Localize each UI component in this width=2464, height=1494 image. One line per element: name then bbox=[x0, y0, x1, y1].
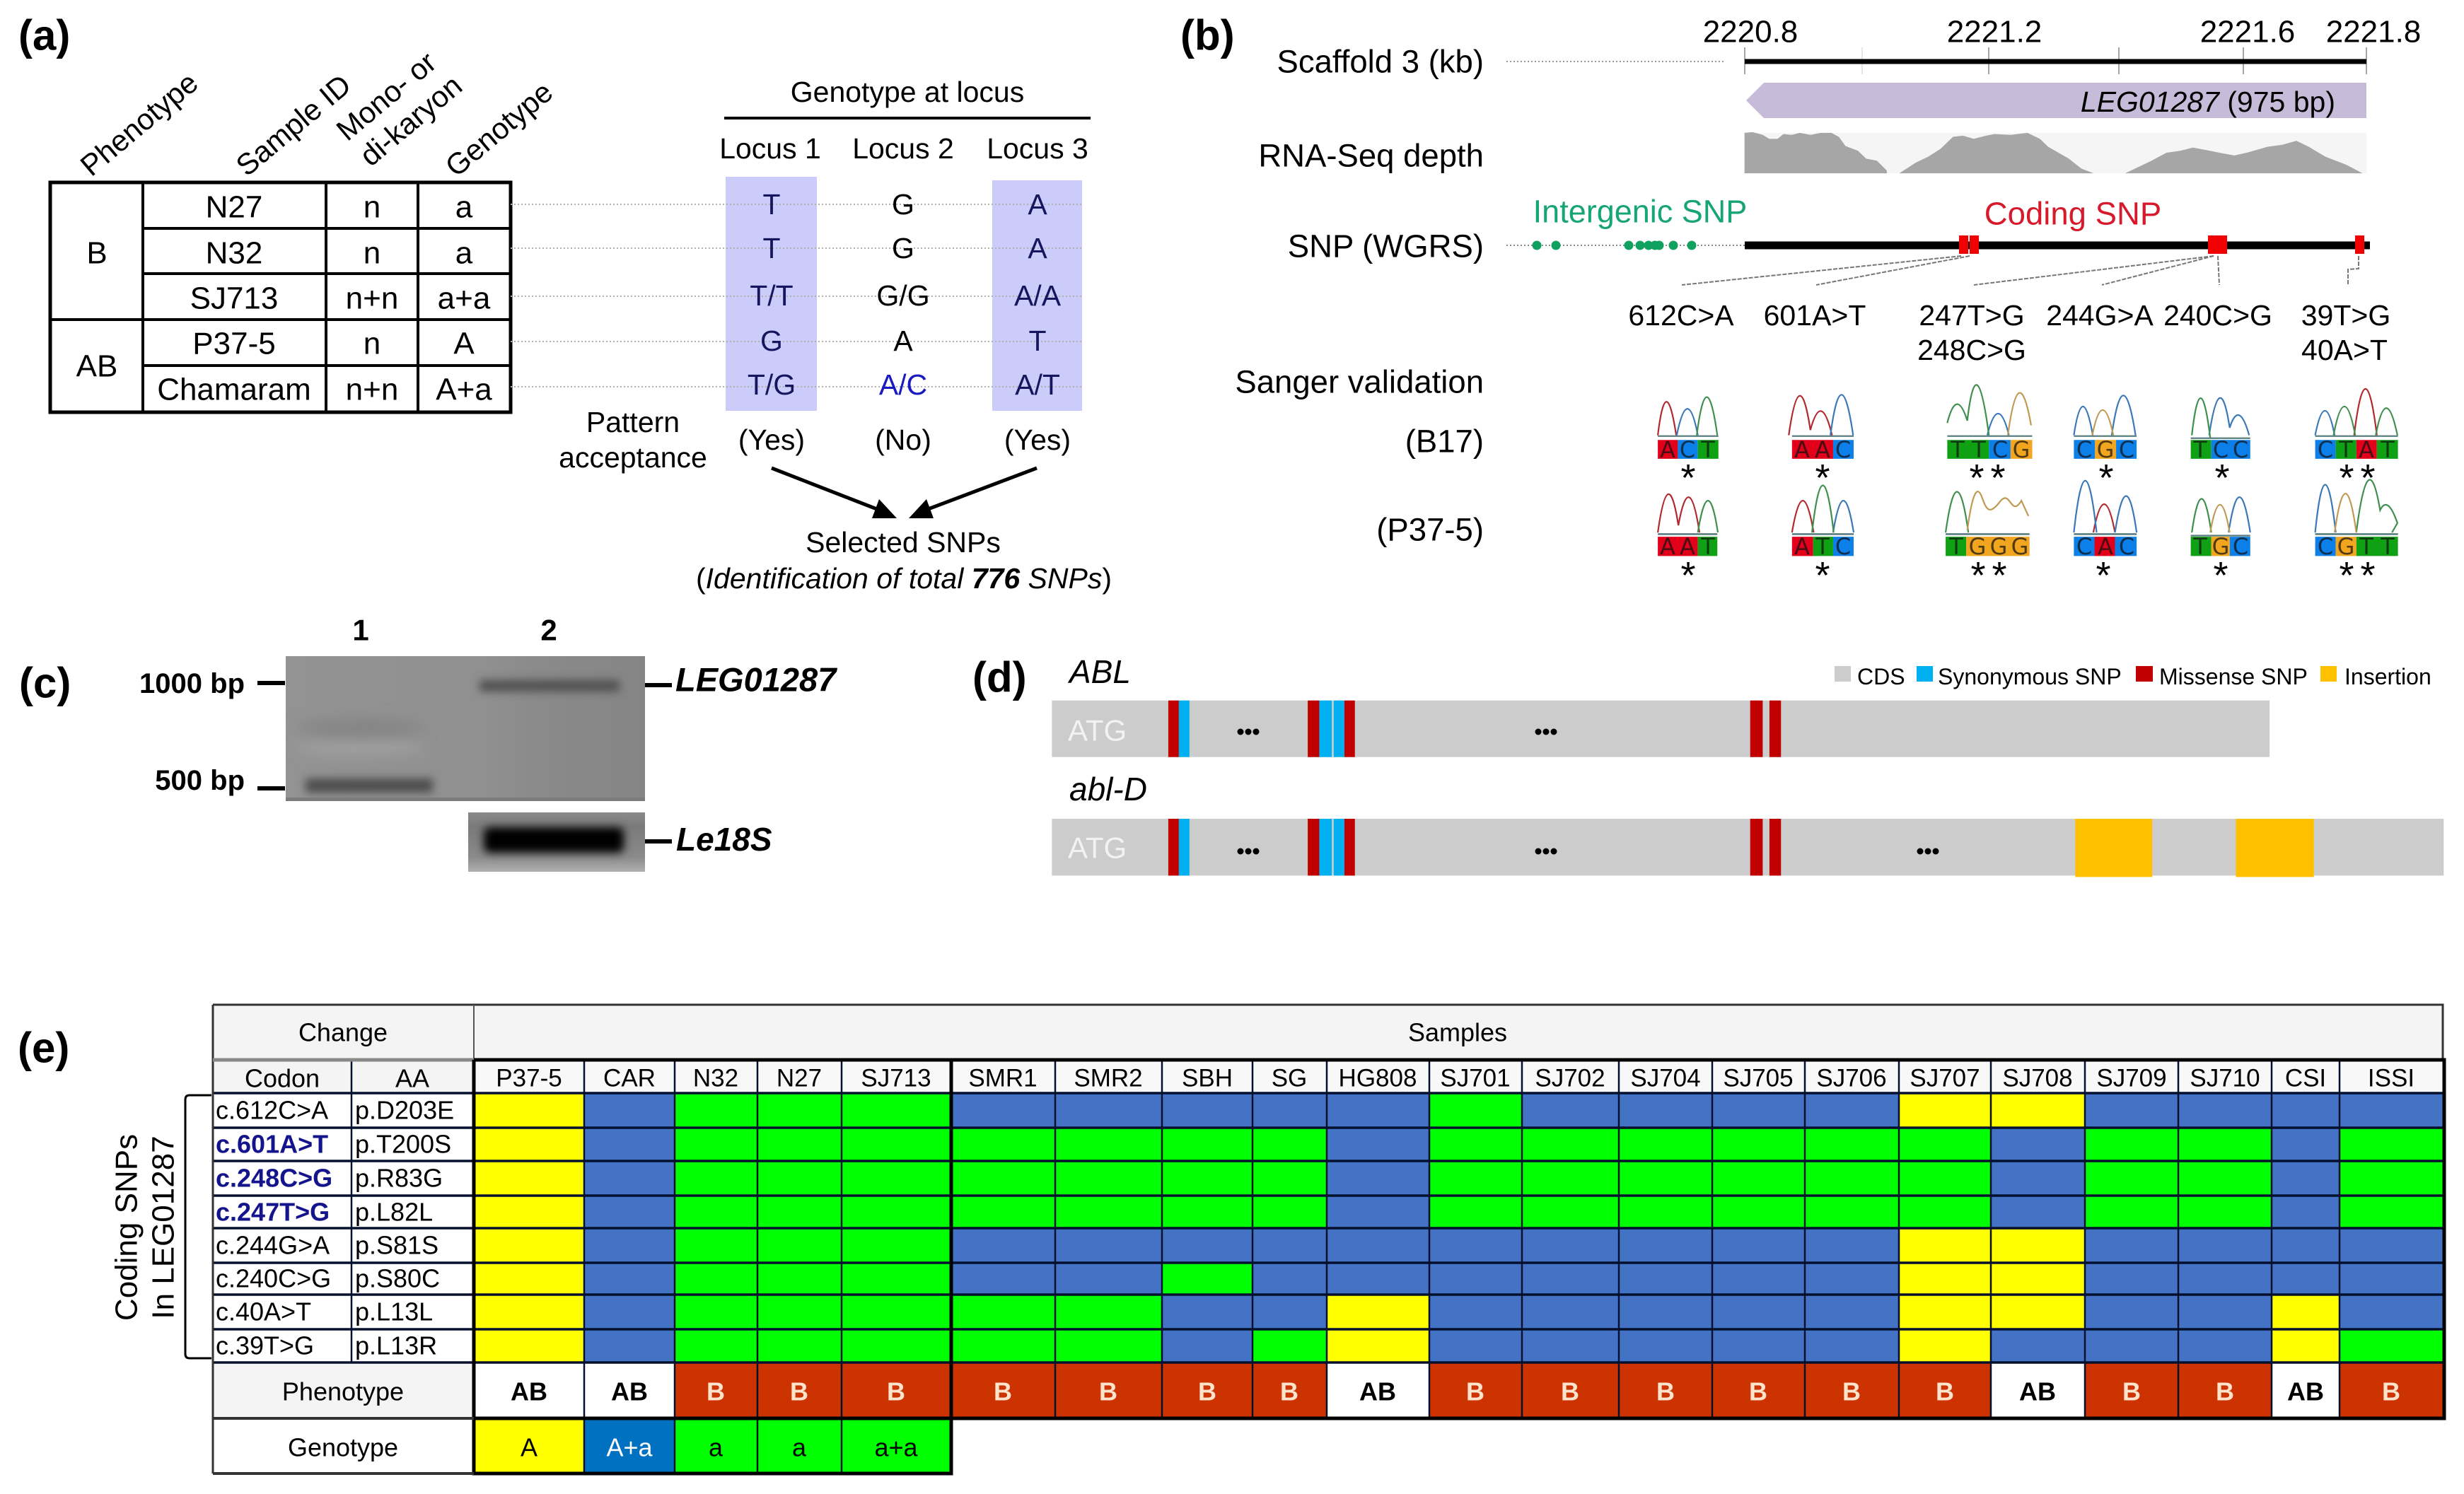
SNP position labels: 247T>G bbox=[1919, 299, 2025, 332]
chromatogram base letters and asterisks: T bbox=[1948, 533, 1963, 560]
scaffold axis: 2221.6 bbox=[2200, 14, 2295, 49]
sample name headers: SMR2 bbox=[1074, 1065, 1143, 1092]
phenotype row: AB bbox=[611, 1377, 648, 1406]
amino acid change labels: p.L13R bbox=[355, 1331, 437, 1360]
chromatogram base letters and asterisks: C bbox=[1992, 436, 2008, 463]
chromatogram base letters and asterisks: * bbox=[1970, 554, 1986, 597]
codon change labels: c.601A>T bbox=[216, 1130, 328, 1158]
panel label (d): (d) bbox=[972, 653, 1027, 701]
RNA-Seq depth track bbox=[1745, 132, 2366, 173]
track labels bbox=[1235, 44, 1484, 547]
amino acid change labels: p.T200S bbox=[355, 1130, 451, 1158]
locus 3 column bbox=[987, 132, 1088, 456]
codon change labels: c.247T>G bbox=[216, 1198, 330, 1226]
locus 1 column: Locus 1 bbox=[719, 132, 821, 165]
genotype row: a bbox=[792, 1432, 807, 1462]
panel label (c): (c) bbox=[19, 659, 71, 707]
intergenic SNP label: Intergenic SNP bbox=[1533, 194, 1747, 229]
coding SNP label: Coding SNP bbox=[1984, 195, 2161, 232]
chromatogram base letters and asterisks: * bbox=[2214, 457, 2230, 499]
phenotype row: B bbox=[790, 1377, 808, 1406]
phenotype row: B bbox=[1466, 1377, 1484, 1406]
SNP position labels: 240C>G bbox=[2163, 299, 2272, 332]
sample name headers: N32 bbox=[693, 1065, 738, 1092]
intergenic SNP markers bbox=[1532, 240, 1696, 250]
table header labels bbox=[245, 1018, 1507, 1093]
chromatogram base letters and asterisks: A bbox=[1660, 533, 1675, 560]
phenotype row: B bbox=[2382, 1377, 2400, 1406]
abl-D gene bar bbox=[1052, 819, 2443, 877]
locus 1 column: T/G bbox=[748, 368, 796, 401]
chromatogram base letters and asterisks: * bbox=[1969, 457, 1984, 499]
chromatogram base letters and asterisks: C bbox=[2076, 436, 2092, 463]
sample name headers: SJ708 bbox=[2002, 1065, 2073, 1092]
legend: Synonymous SNP bbox=[1938, 664, 2122, 689]
SNP track bbox=[1506, 235, 2370, 254]
chromatogram traces: P37-5 bbox=[1658, 480, 2398, 532]
sample name headers: SJ705 bbox=[1723, 1065, 1794, 1092]
gene arrow LEG01287 bbox=[1746, 83, 2366, 118]
genotype row: a+a bbox=[874, 1432, 919, 1462]
phenotype row: B bbox=[1099, 1377, 1117, 1406]
locus 2 column: A/C bbox=[879, 368, 927, 401]
amino acid change labels: p.L82L bbox=[355, 1198, 433, 1226]
locus 1 column: T/T bbox=[750, 279, 794, 312]
sample name headers: N27 bbox=[777, 1065, 822, 1092]
codon change labels: c.240C>G bbox=[216, 1264, 331, 1292]
legend: CDS bbox=[1857, 664, 1905, 689]
chromatogram base letters and asterisks: T bbox=[1950, 436, 1965, 463]
chromatogram base letters and asterisks: T bbox=[2192, 533, 2207, 560]
sample table bbox=[50, 182, 511, 412]
heat cells bbox=[474, 1093, 2443, 1362]
panel: (d) gene structure bbox=[972, 653, 2443, 877]
sample table: N27 bbox=[206, 189, 262, 225]
vertical axis label bbox=[109, 1134, 181, 1321]
chromatogram base letters and asterisks: T bbox=[2359, 533, 2373, 560]
legend: Insertion bbox=[2344, 664, 2431, 689]
phenotype row: Phenotype bbox=[282, 1377, 404, 1406]
chromatogram base letters and asterisks: A bbox=[2098, 533, 2113, 560]
sample table: a bbox=[455, 189, 473, 225]
phenotype row: AB bbox=[2019, 1377, 2056, 1406]
grid lines bbox=[213, 1005, 2444, 1473]
sample table: n bbox=[364, 327, 380, 361]
selected SNPs text: (Identification of total 776 SNPs) bbox=[696, 562, 1112, 595]
loading control gel bbox=[468, 812, 645, 872]
lane numbers bbox=[352, 614, 557, 646]
SNP position labels: 39T>G bbox=[2301, 299, 2390, 332]
chromatogram base letters and asterisks: T bbox=[1700, 436, 1715, 463]
pattern acceptance label: Pattern bbox=[586, 406, 680, 438]
chromatogram base letters and asterisks: T bbox=[2338, 436, 2353, 463]
arrow: locus 3 to selected SNPs bbox=[909, 468, 1037, 518]
chromatogram base letters and asterisks: C bbox=[2119, 533, 2134, 560]
table header labels: Change bbox=[298, 1018, 388, 1046]
rotated column headers: Sample ID bbox=[230, 68, 357, 182]
locus 2 column bbox=[852, 132, 954, 456]
chromatogram traces: B17 bbox=[1658, 385, 2398, 438]
amino acid change labels: p.D203E bbox=[355, 1096, 454, 1124]
sample table: SJ713 bbox=[190, 281, 278, 315]
table header backgrounds bbox=[213, 1005, 2443, 1418]
chromatogram base letters and asterisks: T bbox=[1700, 533, 1715, 560]
chromatogram base letters and asterisks: G bbox=[1990, 533, 2007, 560]
codon change labels: c.39T>G bbox=[216, 1331, 314, 1360]
chromatogram base letters and asterisks: G bbox=[2013, 436, 2030, 463]
sample table: n bbox=[364, 189, 380, 225]
phenotype row: B bbox=[1656, 1377, 1675, 1406]
genotype row: A bbox=[521, 1432, 537, 1462]
size labels: 500 bp bbox=[155, 765, 245, 796]
chromatogram base letters and asterisks: A bbox=[2359, 436, 2374, 463]
panel label (e): (e) bbox=[18, 1024, 69, 1072]
main gel bbox=[286, 656, 645, 802]
SNP position labels: 601A>T bbox=[1764, 299, 1866, 332]
chromatogram base letters and asterisks: C bbox=[2119, 436, 2134, 463]
pattern acceptance label: acceptance bbox=[559, 441, 707, 474]
chromatogram base letters and asterisks: T bbox=[1971, 436, 1986, 463]
locus 3 column: T bbox=[1028, 325, 1047, 357]
chromatogram base letters and asterisks: * bbox=[1680, 554, 1696, 597]
chromatogram base bars bbox=[1658, 436, 2398, 556]
SNP leader lines bbox=[1682, 256, 2359, 285]
table header labels: Codon bbox=[245, 1063, 320, 1093]
phenotype row: B bbox=[1936, 1377, 1954, 1406]
codon change labels bbox=[216, 1096, 332, 1360]
chromatogram base letters and asterisks: * bbox=[2096, 554, 2111, 597]
amino acid change labels bbox=[355, 1096, 454, 1360]
phenotype row: AB bbox=[1359, 1377, 1396, 1406]
LEG01287 gel label: LEG01287 bbox=[675, 660, 837, 699]
chromatogram base letters and asterisks: T bbox=[2380, 533, 2395, 560]
sample table: N32 bbox=[206, 236, 262, 270]
locus 3 column: A bbox=[1028, 188, 1047, 221]
codon change labels: c.244G>A bbox=[216, 1230, 330, 1260]
sample name headers: HG808 bbox=[1339, 1065, 1417, 1092]
sample name headers: CSI bbox=[2285, 1065, 2326, 1092]
vertical axis label: Coding SNPs bbox=[109, 1134, 144, 1321]
bracket bbox=[185, 1095, 211, 1358]
sample name headers: SJ704 bbox=[1630, 1065, 1701, 1092]
chromatogram base letters and asterisks: * bbox=[1815, 457, 1830, 499]
phenotype row: B bbox=[1561, 1377, 1579, 1406]
track labels: SNP (WGRS) bbox=[1288, 228, 1484, 264]
SNP position labels: 248C>G bbox=[1917, 334, 2026, 366]
sample name headers: SJ710 bbox=[2190, 1065, 2260, 1092]
panel: (a) SNP selection pattern bbox=[18, 11, 1112, 595]
rotated column headers: Genotype bbox=[439, 75, 559, 183]
genotype row: Genotype bbox=[288, 1432, 398, 1462]
chromatogram base letters and asterisks: A bbox=[1660, 436, 1675, 463]
locus 2 column: Locus 2 bbox=[852, 132, 954, 165]
phenotype row: AB bbox=[2287, 1377, 2324, 1406]
SNP position labels: 612C>A bbox=[1628, 299, 1734, 332]
chromatogram base letters and asterisks: T bbox=[2380, 436, 2395, 463]
ellipsis dots bbox=[1238, 728, 1939, 854]
sample name headers: P37-5 bbox=[496, 1065, 562, 1092]
sample table: n+n bbox=[346, 372, 398, 407]
sample table: A+a bbox=[436, 372, 492, 407]
track labels: Scaffold 3 (kb) bbox=[1277, 44, 1484, 79]
codon change labels: c.248C>G bbox=[216, 1164, 332, 1192]
chromatogram base letters and asterisks: C bbox=[2233, 533, 2248, 560]
sample name headers: SJ706 bbox=[1816, 1065, 1887, 1092]
sample table: AB bbox=[76, 349, 117, 383]
chromatogram base letters and asterisks: A bbox=[1815, 436, 1830, 463]
locus 2 column: G bbox=[892, 188, 914, 221]
track labels: Sanger validation bbox=[1235, 363, 1484, 400]
locus 2 column: G/G bbox=[876, 279, 930, 312]
phenotype row: B bbox=[1749, 1377, 1767, 1406]
sample name headers: CAR bbox=[603, 1065, 656, 1092]
phenotype row: AB bbox=[511, 1377, 547, 1406]
chromatogram base letters and asterisks: C bbox=[2213, 436, 2228, 463]
lane numbers: 2 bbox=[540, 614, 557, 646]
phenotype row: B bbox=[1280, 1377, 1298, 1406]
sample name headers: SJ701 bbox=[1440, 1065, 1511, 1092]
chromatogram base letters and asterisks: * bbox=[1680, 457, 1696, 499]
amino acid change labels: p.S80C bbox=[355, 1264, 440, 1292]
sample name headers bbox=[496, 1065, 2414, 1092]
locus 2 column: A bbox=[893, 325, 913, 357]
chromatogram base letters and asterisks: * bbox=[2360, 457, 2376, 499]
locus 1 column: G bbox=[760, 325, 783, 357]
locus 2 column: (No) bbox=[875, 424, 931, 456]
ATG labels: ATG bbox=[1068, 831, 1127, 864]
scaffold axis: 2221.8 bbox=[2326, 14, 2421, 49]
chromatogram base letters and asterisks: G bbox=[2097, 436, 2114, 463]
track labels: (B17) bbox=[1405, 423, 1484, 460]
sample name headers: SMR1 bbox=[968, 1065, 1038, 1092]
sample name headers: ISSI bbox=[2368, 1065, 2414, 1092]
genotype row: a bbox=[709, 1432, 723, 1462]
chromatogram base letters and asterisks: C bbox=[2318, 533, 2333, 560]
selected SNPs text bbox=[696, 526, 1112, 595]
rotated column headers: di-karyon bbox=[354, 69, 468, 173]
sample table: n bbox=[364, 236, 380, 270]
SNP position labels: 244G>A bbox=[2046, 299, 2154, 332]
phenotype row: B bbox=[1198, 1377, 1216, 1406]
rotated column headers bbox=[74, 45, 559, 183]
panel: (e) coding SNP genotype table bbox=[18, 1005, 2444, 1473]
scaffold axis bbox=[1506, 14, 2421, 74]
panel label (b): (b) bbox=[1180, 11, 1235, 59]
amino acid change labels: p.R83G bbox=[355, 1164, 443, 1192]
chromatogram base letters and asterisks: * bbox=[2213, 554, 2228, 597]
phenotype row: B bbox=[707, 1377, 725, 1406]
chromatogram base letters and asterisks: C bbox=[2076, 533, 2092, 560]
locus 3 column: A/T bbox=[1015, 368, 1060, 401]
scaffold axis: 2220.8 bbox=[1703, 14, 1798, 49]
chromatogram base letters and asterisks: T bbox=[1815, 533, 1830, 560]
ATG labels bbox=[1068, 714, 1127, 864]
codon change labels: c.40A>T bbox=[216, 1297, 311, 1326]
locus 2 column: G bbox=[892, 232, 914, 264]
chromatogram base letters and asterisks: A bbox=[1794, 533, 1810, 560]
locus 3 column: Locus 3 bbox=[987, 132, 1088, 165]
SNP position labels: 40A>T bbox=[2301, 334, 2388, 366]
sample name headers: SJ713 bbox=[861, 1065, 931, 1092]
phenotype row: B bbox=[2122, 1377, 2141, 1406]
track labels: RNA-Seq depth bbox=[1258, 137, 1484, 174]
pattern acceptance label bbox=[559, 406, 707, 474]
sample name headers: SJ702 bbox=[1535, 1065, 1605, 1092]
legend bbox=[1835, 664, 2431, 689]
chromatogram base letters and asterisks: G bbox=[2011, 533, 2028, 560]
sample table: Chamaram bbox=[157, 372, 311, 407]
panel: (b) locus map and Sanger validation bbox=[1180, 11, 2421, 597]
chromatogram base letters and asterisks: * bbox=[2098, 457, 2114, 499]
vertical axis label: In LEG01287 bbox=[146, 1136, 181, 1319]
sample table: B bbox=[86, 236, 107, 270]
rotated column headers: Phenotype bbox=[74, 66, 204, 182]
genotype row bbox=[288, 1418, 951, 1473]
ABL label: ABL bbox=[1067, 653, 1131, 690]
size marker ticks bbox=[257, 683, 672, 841]
chromatogram base letters and asterisks: A bbox=[1794, 436, 1810, 463]
chromatogram base letters and asterisks: * bbox=[2339, 457, 2354, 499]
size labels: 1000 bp bbox=[139, 668, 245, 699]
locus 1 column bbox=[719, 132, 821, 456]
panel label (a): (a) bbox=[18, 11, 70, 59]
chromatogram base letters and asterisks: C bbox=[2233, 436, 2248, 463]
rotated column headers: Mono- or bbox=[330, 45, 443, 147]
locus 1 column: T bbox=[762, 232, 781, 264]
ABL gene bar bbox=[1052, 701, 2270, 757]
locus 1 column: T bbox=[762, 188, 781, 221]
sample table: n+n bbox=[346, 281, 398, 315]
chromatogram base letters and asterisks: C bbox=[1835, 436, 1851, 463]
sample name headers: SJ709 bbox=[2096, 1065, 2167, 1092]
amino acid change labels: p.L13L bbox=[355, 1297, 433, 1326]
locus 3 column: A bbox=[1028, 232, 1047, 264]
chromatogram base letters and asterisks: G bbox=[1969, 533, 1986, 560]
phenotype row: B bbox=[1842, 1377, 1861, 1406]
codon change labels: c.612C>A bbox=[216, 1096, 328, 1124]
chromatogram base letters and asterisks: A bbox=[1680, 533, 1695, 560]
chromatogram base letters and asterisks: C bbox=[1680, 436, 1695, 463]
chromatogram base letters and asterisks: G bbox=[2212, 533, 2229, 560]
chromatogram base letters and asterisks: C bbox=[2318, 436, 2333, 463]
size labels bbox=[139, 668, 245, 796]
ATG labels: ATG bbox=[1068, 714, 1127, 747]
genotype at locus heading: Genotype at locus bbox=[791, 76, 1024, 108]
phenotype row bbox=[282, 1362, 2443, 1418]
lane numbers: 1 bbox=[352, 614, 369, 646]
locus 3 column: (Yes) bbox=[1004, 424, 1071, 456]
sample table: A bbox=[453, 327, 475, 361]
sample table: a+a bbox=[438, 281, 491, 315]
chromatogram base letters and asterisks bbox=[1660, 436, 2395, 597]
Le18S gel label: Le18S bbox=[676, 821, 772, 858]
phenotype row: B bbox=[994, 1377, 1012, 1406]
chromatogram base letters and asterisks: * bbox=[1990, 457, 2006, 499]
locus 3 column: A/A bbox=[1014, 279, 1062, 312]
sample name headers: SJ707 bbox=[1910, 1065, 1980, 1092]
locus column highlight bars bbox=[726, 177, 1082, 411]
coding SNP markers bbox=[1959, 235, 2364, 254]
table header labels: Samples bbox=[1408, 1018, 1507, 1046]
phenotype row: B bbox=[2216, 1377, 2234, 1406]
legend: Missense SNP bbox=[2159, 664, 2308, 689]
chromatogram base letters and asterisks: * bbox=[2360, 554, 2376, 597]
SNP position labels bbox=[1628, 299, 2390, 366]
amino acid change labels: p.S81S bbox=[355, 1230, 438, 1260]
chromatogram base letters and asterisks: * bbox=[2339, 554, 2354, 597]
sample table: P37-5 bbox=[192, 327, 276, 361]
scaffold axis: 2221.2 bbox=[1947, 14, 2042, 49]
chromatogram base letters and asterisks: C bbox=[1835, 533, 1851, 560]
arrow: locus 1 to selected SNPs bbox=[772, 468, 897, 518]
chromatogram base letters and asterisks: * bbox=[1815, 554, 1830, 597]
track labels: (P37-5) bbox=[1376, 512, 1484, 547]
sample name headers: SG bbox=[1272, 1065, 1307, 1092]
genotype row: A+a bbox=[606, 1432, 653, 1462]
locus 1 column: (Yes) bbox=[738, 424, 805, 456]
chromatogram base letters and asterisks: T bbox=[2192, 436, 2207, 463]
chromatogram base letters and asterisks: * bbox=[1992, 554, 2007, 597]
sample name headers: SBH bbox=[1182, 1065, 1233, 1092]
sample table: a bbox=[455, 236, 473, 270]
abl-D label: abl-D bbox=[1069, 771, 1147, 807]
table header labels: AA bbox=[395, 1063, 429, 1093]
selected SNPs text: Selected SNPs bbox=[806, 526, 1001, 559]
panel: (c) gel image bbox=[19, 614, 837, 872]
gene arrow LEG01287: LEG01287 (975 bp) bbox=[2081, 86, 2335, 118]
phenotype row: B bbox=[887, 1377, 905, 1406]
chromatogram base letters and asterisks: G bbox=[2337, 533, 2354, 560]
